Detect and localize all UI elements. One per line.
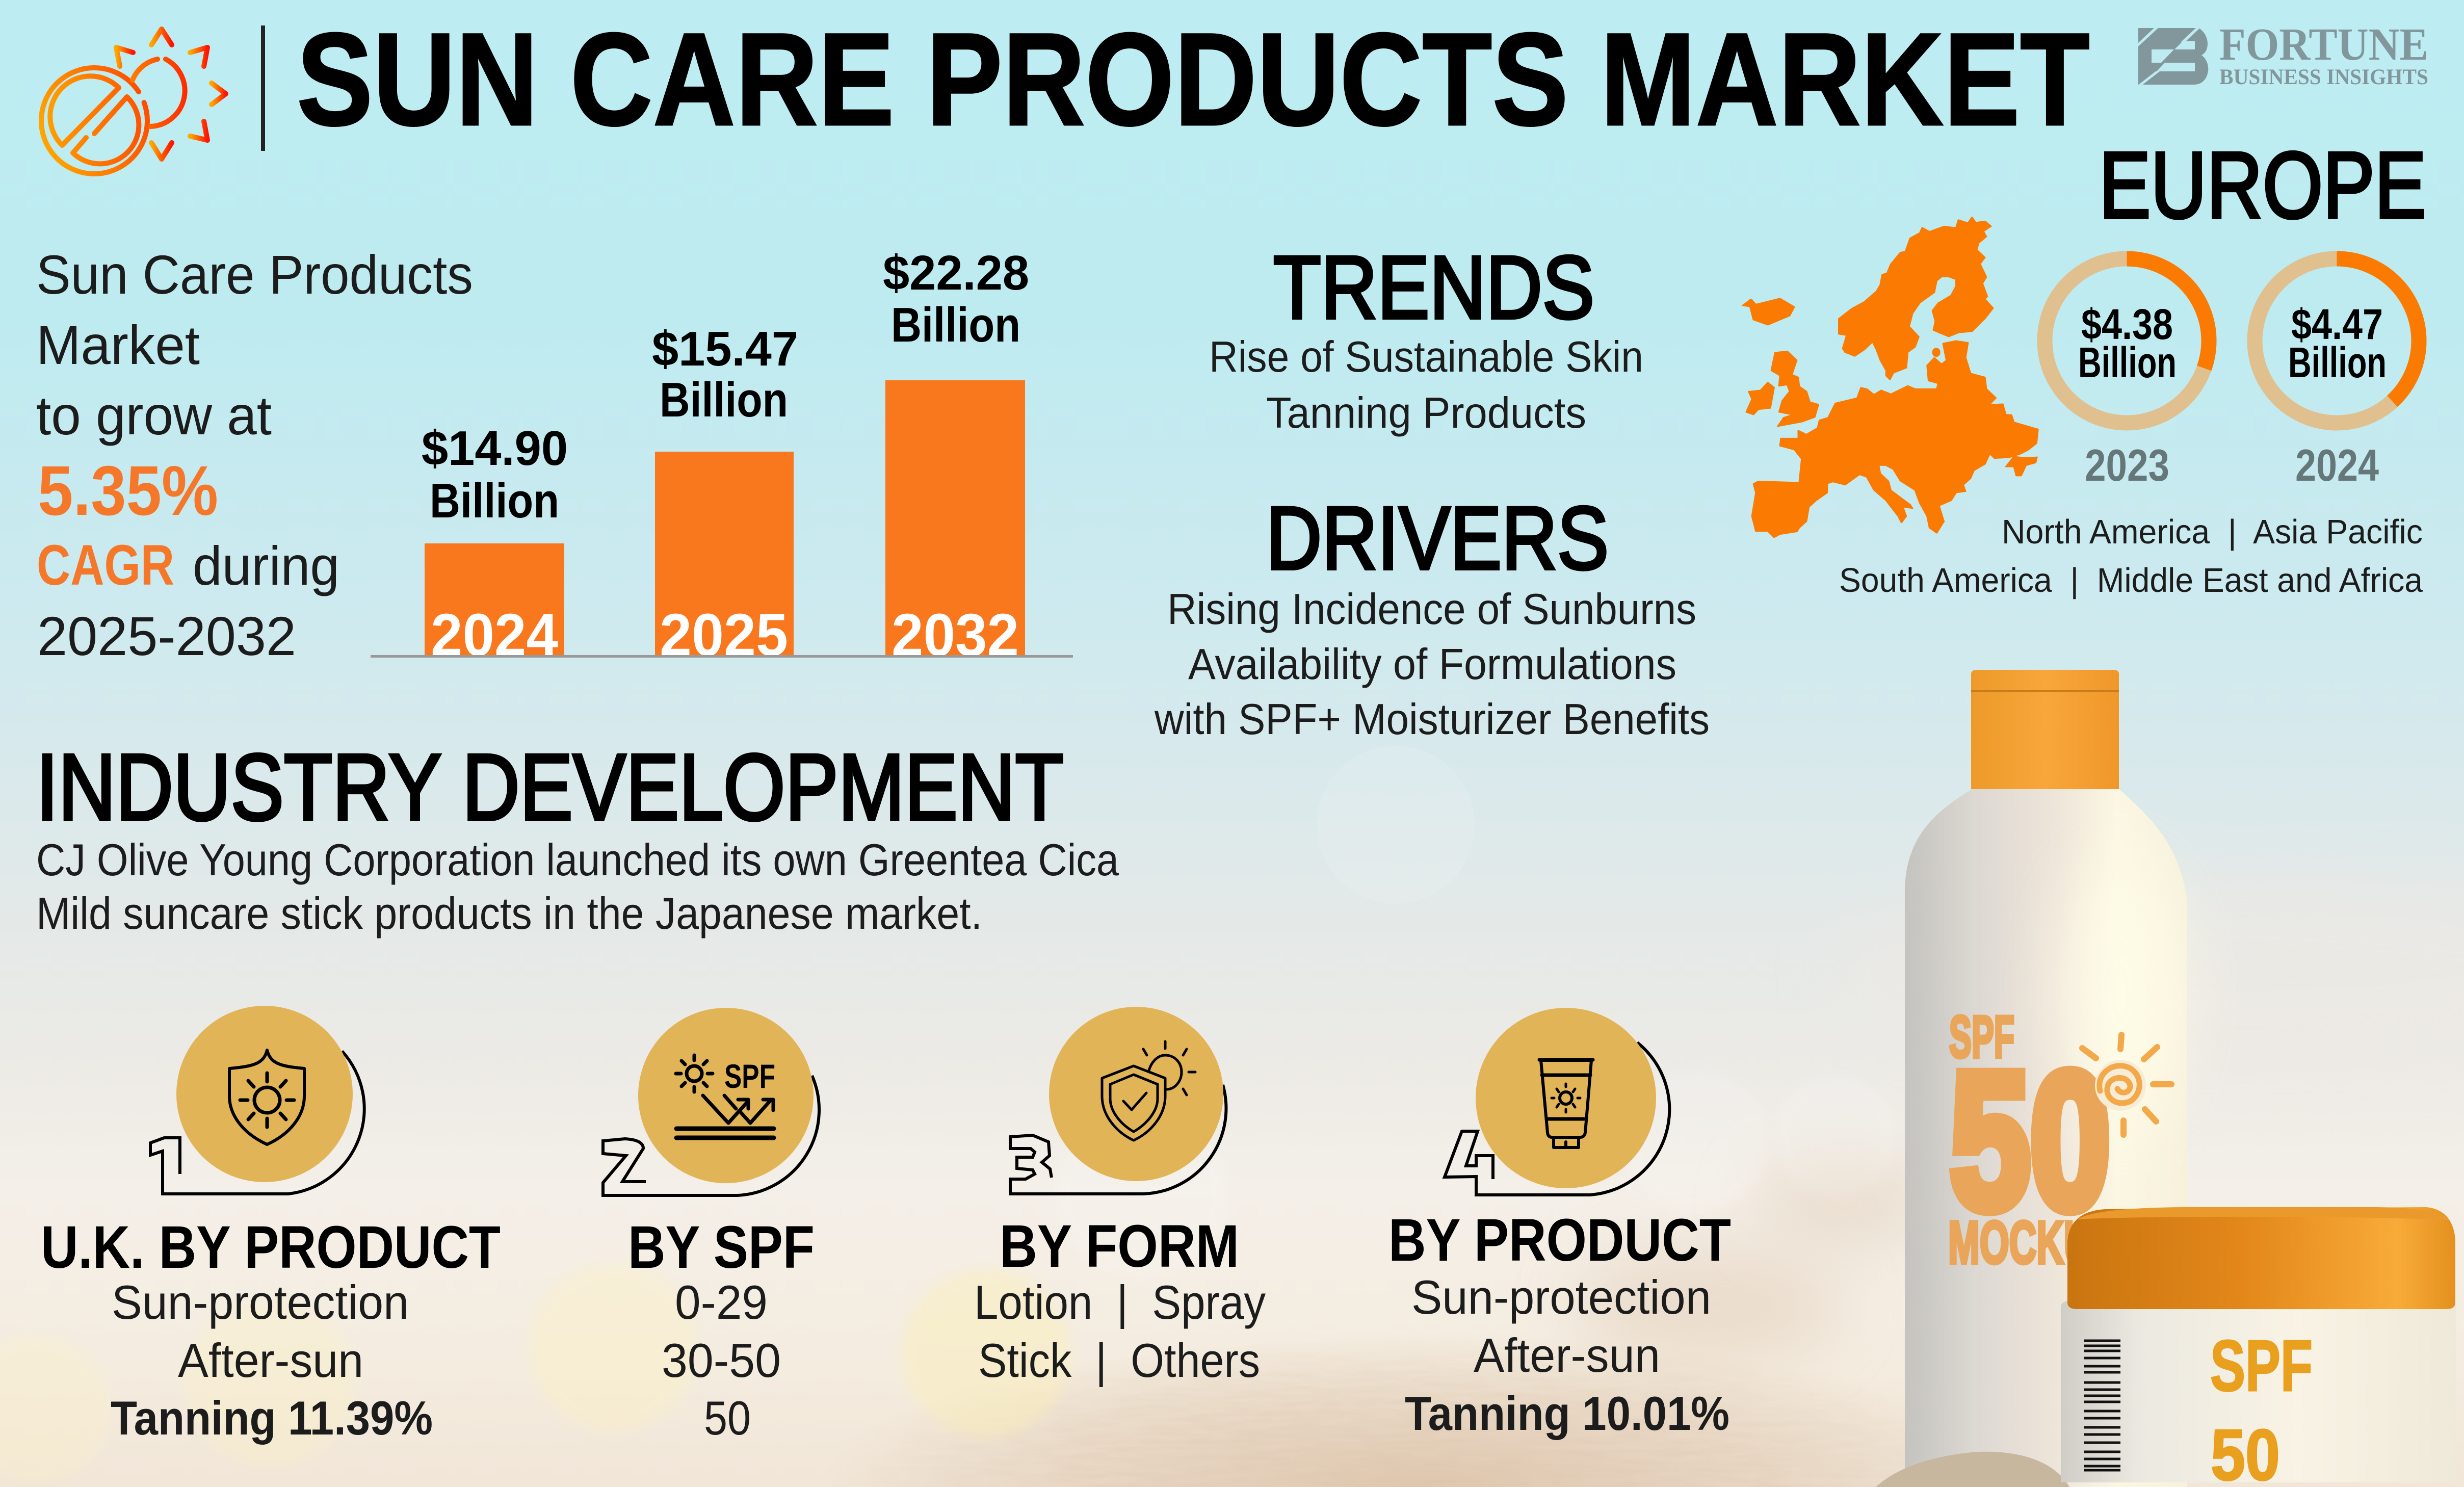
industry development <box>36 735 1119 938</box>
other regions list: South America | Middle East and Africa <box>1839 561 2423 599</box>
text block: market growth: 2025-2032 <box>37 605 296 667</box>
drivers: DRIVERS <box>1266 489 1609 588</box>
text block: market growth: Sun Care Products <box>36 244 473 305</box>
donut: Europe 2023: 2023 <box>2085 440 2169 490</box>
segment 2: by SPF: 30-50 <box>662 1334 781 1387</box>
segment 2: by SPF: BY SPF <box>628 1214 815 1281</box>
segment 3: by form: Lotion | Spray <box>974 1275 1266 1329</box>
trends: TRENDS <box>1273 238 1594 337</box>
sand mound <box>1876 1452 2069 1487</box>
donut: Europe 2024: Billion <box>2288 338 2387 386</box>
donut: Europe 2023: Billion <box>2078 338 2177 386</box>
segment 4: by product: Tanning 10.01% <box>1405 1387 1729 1440</box>
title: SUN CARE PRODUCTS MARKET <box>297 6 2090 153</box>
icon: sunscreen tube <box>1476 1008 1656 1188</box>
bar chart: market size: $22.28 <box>883 246 1029 300</box>
segment 4: by product <box>1388 1008 1731 1440</box>
donut: Europe 2023 <box>2045 259 2209 490</box>
trends: Tanning Products <box>1266 389 1586 437</box>
donut: Europe 2023: $4.38 <box>2081 300 2173 348</box>
donut: Europe 2024: 2024 <box>2295 440 2379 490</box>
segment 3: by form: BY FORM <box>1000 1213 1239 1280</box>
text block: market growth: during <box>193 535 339 596</box>
segment 2: by SPF: 50 <box>704 1391 751 1445</box>
drivers: with SPF+ Moisturizer Benefits <box>1154 695 1710 744</box>
segment 4: by product: Sun-protection <box>1411 1270 1711 1324</box>
donut: Europe 2024: $4.47 <box>2291 300 2383 348</box>
segment 3: by form <box>974 1007 1266 1387</box>
bar chart: market size: $15.47 <box>652 322 798 376</box>
icon: shield and sun <box>1049 1007 1223 1181</box>
jar label <box>2210 1325 2313 1487</box>
bottle label: MOCKUP <box>1948 1209 2116 1276</box>
bar chart: market size: 2032 <box>892 602 1019 669</box>
map: Europe <box>1742 217 2038 537</box>
trends: Rise of Sustainable Skin <box>1209 333 1643 381</box>
segment 1: U.K. by product: Tanning 11.39% <box>111 1391 433 1445</box>
bar chart: market size <box>371 246 1073 669</box>
logo: Fortune Business Insights: FORTUNE <box>2219 19 2428 70</box>
drivers: Availability of Formulations <box>1188 640 1676 689</box>
icon: SPF sun and arrows: SPF <box>724 1057 775 1095</box>
bar chart: market size: 2025 <box>660 602 788 669</box>
segment 1: U.K. by product: After-sun <box>178 1334 363 1387</box>
text block: market growth: to grow at <box>36 384 272 446</box>
segment 4: by product: After-sun <box>1474 1328 1660 1382</box>
drivers <box>1154 489 1710 744</box>
bar chart: market size: 2024 <box>431 602 558 669</box>
bottle label: SPF <box>1949 1004 2014 1070</box>
icon: sun shield <box>176 1006 353 1182</box>
other regions list <box>1839 513 2423 599</box>
text block: market growth: Market <box>36 314 200 376</box>
industry development: Mild suncare stick products in the Japanese market. <box>36 888 982 938</box>
trends <box>1209 238 1643 437</box>
bottle label: 50 <box>1950 1032 2110 1249</box>
icon: SPF sun and arrows <box>638 1008 814 1183</box>
icon: sun care logo <box>27 29 226 189</box>
segment 1: U.K. by product <box>41 1006 501 1445</box>
bar chart: market size: Billion <box>891 298 1020 352</box>
industry development: CJ Olive Young Corporation launched its own Greentea Cica <box>36 834 1119 885</box>
bar chart: market size: Billion <box>430 474 559 528</box>
text block: market growth <box>36 244 473 667</box>
segment 4: by product: BY PRODUCT <box>1388 1207 1731 1274</box>
jar label: SPF <box>2210 1325 2313 1406</box>
text block: market growth: CAGR <box>37 533 174 597</box>
bar chart: market size: Billion <box>660 373 788 427</box>
industry development: INDUSTRY DEVELOPMENT <box>36 735 1064 840</box>
divider <box>261 25 265 151</box>
background: sky fading into sand <box>0 457 2464 1487</box>
product: SPF 50 jar <box>2061 1207 2456 1487</box>
segment 1: U.K. by product: Sun-protection <box>112 1275 409 1329</box>
logo: Fortune Business Insights: BUSINESS INSIGHTS <box>2219 65 2428 89</box>
bar chart: market size: $14.90 <box>422 421 568 476</box>
number outline 4 <box>1445 1042 1669 1195</box>
segment 1: U.K. by product: U.K. BY PRODUCT <box>41 1214 501 1281</box>
segment 3: by form: Stick | Others <box>978 1334 1260 1387</box>
barcode <box>2084 1341 2120 1470</box>
other regions list: North America | Asia Pacific <box>2002 513 2423 551</box>
drivers: Rising Incidence of Sunburns <box>1167 585 1696 634</box>
number outline 3 <box>1010 1085 1226 1194</box>
donut: Europe 2024 <box>2255 259 2419 490</box>
logo: Fortune Business Insights <box>2137 19 2428 89</box>
number outline 1 <box>150 1051 364 1194</box>
icon: sun swirl <box>2082 1035 2171 1135</box>
product: SPF 50 bottle <box>1905 670 2187 1487</box>
segment 2: by SPF: 0-29 <box>675 1275 768 1329</box>
text block: market growth: 5.35% <box>38 452 218 530</box>
bottle label <box>1948 1004 2116 1276</box>
number outline 2 <box>603 1076 819 1195</box>
segment 2: by SPF <box>603 1008 819 1445</box>
